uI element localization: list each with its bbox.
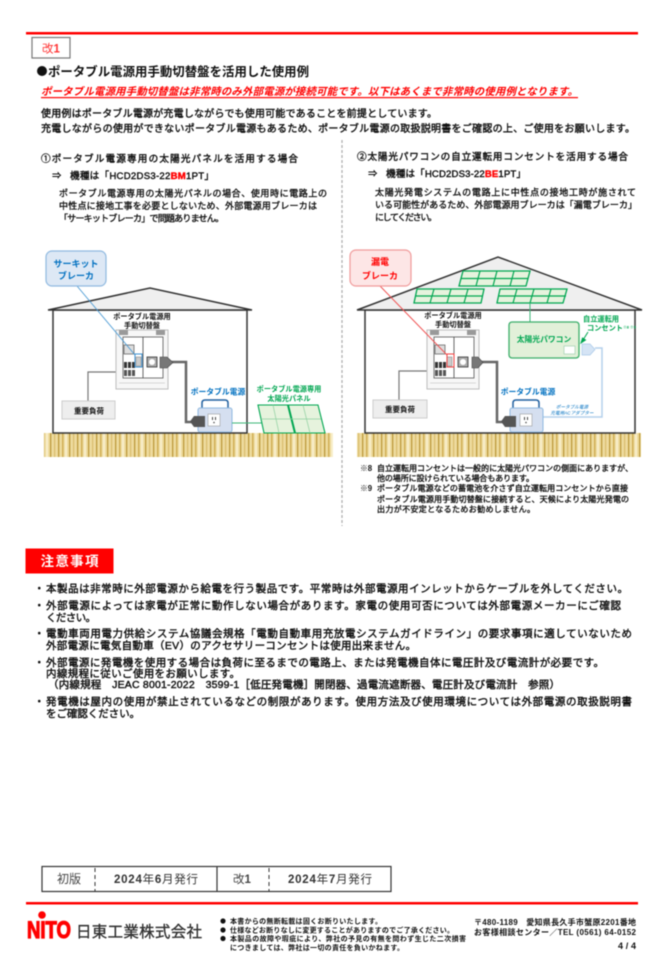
bottom red rule: [26, 902, 638, 904]
legal notes: につきましては、弊社は一切の責任を負いかねます。: [230, 943, 404, 952]
link wire: [232, 422, 262, 424]
notes list: 発電機は屋内の使用が禁止されているなどの制限があります。使用方法及び使用環境については外部電源の取扱説明書: [46, 695, 632, 708]
panel: case 2 text: ②太陽光パワコンの自立運転用コンセントを活用する場合: [357, 151, 628, 163]
switchboard label: ポータブル電源用: [424, 311, 482, 320]
panel: case 2 text: 太陽光発電システムの電路上に中性点の接地工時が施されて: [375, 186, 636, 198]
callout: circuit breaker: [46, 251, 106, 286]
legal notes: 仕様などお断りなしに変更することがありますのでご了承ください。: [230, 926, 454, 934]
notes list: をご確認ください。: [46, 707, 140, 720]
adapter label: [550, 404, 594, 416]
portable power label: ポータブル電源: [191, 386, 245, 396]
power conditioner: [509, 322, 579, 358]
adapter label: 充電用ACアダプター: [550, 410, 594, 416]
notes heading: 注意事項: [40, 553, 99, 569]
roof solar panels: [414, 271, 567, 303]
notes list: ・: [34, 583, 44, 595]
notes list: 本製品は非常時に外部電源から給電を行う製品です。平常時は外部電源用インレットからケーブルを外してください。: [46, 582, 628, 595]
legal notes: 本書からの無断転載は固くお断りいたします。: [230, 916, 382, 926]
cable: [480, 362, 506, 422]
footnotes: ※9: [360, 484, 373, 493]
callout: circuit breaker: ブレーカ: [58, 270, 94, 281]
important load box: 重要負荷: [74, 406, 104, 416]
column divider: [341, 140, 343, 526]
company address: お客様相談センター／TEL (0561) 64-0152: [474, 927, 637, 937]
load wire: [88, 372, 116, 401]
revision table: 改1: [233, 872, 252, 886]
footnotes: [360, 463, 633, 514]
notes list: （内線規程 JEAC 8001-2022 3599-1［低圧発電機］開閉器、過電流遮断器、電圧計及び電流計 参照）: [48, 678, 560, 691]
solar panel: [258, 405, 325, 433]
solar panel label: 太陽光パネル: [267, 394, 311, 403]
load wire: [399, 371, 428, 400]
roof wire: [529, 303, 531, 322]
revision table: 2024年6月発行: [114, 872, 198, 886]
notes heading: [26, 548, 114, 574]
adapter cable: [543, 348, 602, 417]
callout leader: [380, 286, 447, 355]
notes list: 外部電源に電気自動車（EV）のアクセサリーコンセントは使用出来ません。: [46, 639, 416, 652]
highlight on breaker: [447, 354, 454, 367]
switchboard label: 手動切替盤: [124, 321, 160, 330]
switchboard label: [424, 311, 482, 329]
notes list: ・: [34, 600, 44, 612]
outlet arrow: [581, 332, 588, 343]
plug at switchboard: [160, 357, 173, 368]
panel: case 1 text: ⇒: [52, 171, 62, 182]
standalone outlet label: ※8 ※9: [623, 326, 636, 330]
adapter plug: [582, 344, 595, 355]
footnotes: ※8: [360, 464, 373, 473]
callout: earth leakage breaker: ブレーカ: [362, 270, 398, 281]
page number: 4/4: [618, 941, 636, 951]
revision table: 初版: [57, 872, 81, 886]
notes list: ・: [34, 657, 44, 669]
important load box: 重要負荷: [385, 404, 415, 414]
panel: case 2 text: 機種は「HCD2DS3-22BE1PT」: [386, 168, 526, 180]
panel: case 1 text: ①ポータブル電源専用の太陽光パネルを活用する場合: [41, 153, 298, 165]
logo: [27, 911, 202, 944]
plug at switchboard: [472, 357, 483, 368]
legal notes: 本製品の故障や瑕疵により、弊社の予見の有無を問わず生じた二次損害: [230, 934, 466, 943]
manual switchboard: [116, 330, 168, 389]
standalone outlet label: [583, 314, 636, 332]
portable power station: [190, 400, 232, 432]
legal notes: [220, 916, 466, 952]
panel: case 2 text: [357, 151, 637, 222]
important load box: [62, 401, 115, 419]
switchboard label: [113, 312, 171, 330]
manual switchboard: [427, 330, 479, 389]
intro text: 充電しながらの使用ができないポータブル電源もあるため、ポータブル電源の取扱説明書をご確認の上、ご使用をお願いします。: [41, 122, 635, 135]
power conditioner: 太陽光パワコン: [517, 334, 571, 344]
notes list: ください。: [46, 612, 96, 624]
callout: earth leakage breaker: 漏電: [371, 256, 389, 267]
notes list: 外部電源に発電機を使用する場合は負荷に至るまでの電路上、または発電機自体に電圧計及び電流計が必要です。: [46, 656, 604, 669]
callout leader: [77, 286, 135, 355]
logo: 日東工業株式会社: [76, 923, 202, 941]
company address: [474, 917, 637, 937]
notes list: [34, 582, 632, 720]
panel: case 1 text: 「サーキットブレーカ」で問題ありません。: [59, 212, 224, 224]
house: [48, 288, 252, 433]
important load box: [373, 400, 427, 418]
top red rule: [26, 32, 638, 34]
standalone outlet label: コンセント: [587, 324, 623, 332]
adapter label: ポータブル電源: [556, 404, 589, 410]
switchboard label: 手動切替盤: [435, 320, 471, 329]
callout: circuit breaker: サーキット: [53, 259, 99, 269]
notes list: ・: [34, 628, 44, 640]
ground: [357, 433, 641, 457]
title: ポータブル電源用手動切替盤を活用した使用例: [48, 64, 309, 79]
notes list: 電動車両用電力供給システム協議会規格「電動自動車用充放電システムガイドライン」の要求事項に適していないため: [46, 627, 632, 640]
diagram: left house with portable solar panel: [44, 251, 333, 457]
footnotes: ポータブル電源用手動切替盤に接続すると、天候により太陽光発電の: [377, 494, 629, 504]
intro text: 使用例はポータブル電源が充電しながらでも使用可能であることを前提としています。: [41, 107, 437, 120]
company address: 〒480-1189 愛知県長久手市蟹原2201番地: [474, 917, 636, 927]
revision badge: [32, 38, 70, 58]
solar panel label: [257, 384, 321, 403]
solar panel label: ポータブル電源専用: [257, 384, 321, 394]
footnotes: 自立運転用コンセントは一般的に太陽光パワコンの側面にありますが、: [377, 463, 633, 473]
panel: case 2 text: いる可能性があるため、外部電源用ブレーカは「漏電ブレーカ」: [375, 199, 637, 210]
portable power station: [501, 400, 543, 432]
notes list: 外部電源によっては家電が正常に動作しない場合があります。家電の使用可否については外部電源メーカーにご確認: [46, 599, 622, 612]
panel: case 2 text: ⇒: [368, 169, 378, 180]
notes list: ・: [34, 696, 44, 708]
footnotes: ポータブル電源などの蓄電池を介さず自立運転用コンセントから直接: [377, 483, 628, 493]
diagram: right house with rooftop solar: [350, 250, 642, 457]
panel: case 1 text: 中性点に接地工事を必要としないため、外部電源用ブレーカは: [59, 200, 317, 211]
highlight on breaker: [135, 354, 142, 367]
revision table: 2024年7月発行: [288, 872, 372, 886]
switchboard label: ポータブル電源用: [113, 312, 171, 321]
panel: case 1 text: [41, 153, 327, 224]
panel: case 1 text: ポータブル電源専用の太陽光パネルの場合、使用時に電路上の: [59, 188, 327, 198]
panel: case 1 text: 機種は「HCD2DS3-22BM1PT」: [70, 170, 214, 182]
callout: earth leakage breaker: [350, 250, 411, 286]
notes list: 内線規程に従いご使用をお願いします。: [46, 667, 240, 680]
revision badge: 改1: [42, 42, 61, 56]
logo: NITO: [27, 917, 71, 944]
ground: [44, 433, 333, 457]
panel: case 2 text: にしてください。: [375, 212, 437, 222]
footnotes: 他の場所に設けられている場合もあります。: [377, 473, 534, 483]
red warning line: ポータブル電源用手動切替盤は非常時のみ外部電源が接続可能です。以下はあくまで非常時の使用例となります。: [41, 85, 578, 98]
cable: [170, 362, 196, 422]
standalone outlet label: 自立運転用: [583, 314, 619, 324]
intro text: [41, 107, 635, 135]
revision table: [42, 866, 391, 892]
footnotes: 出力が不安定となるためお勧めしません。: [377, 504, 535, 514]
portable power label: ポータブル電源: [501, 386, 555, 396]
house: [357, 257, 642, 433]
